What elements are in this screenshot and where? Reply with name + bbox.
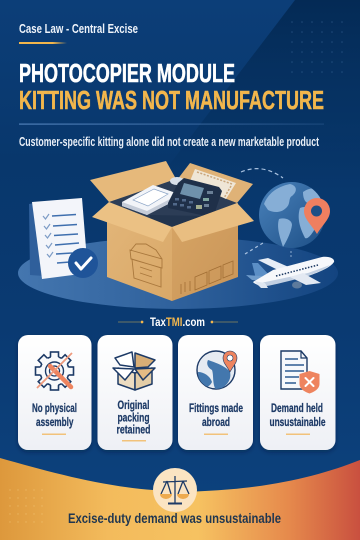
icon: globe and pin — [197, 351, 237, 390]
label: Original — [118, 398, 150, 412]
label: retained — [116, 422, 150, 436]
label — [189, 401, 243, 429]
brand label — [118, 315, 238, 329]
label: No physical — [32, 401, 77, 415]
platform disc — [18, 237, 338, 309]
label: assembly — [36, 415, 74, 429]
handling marks — [181, 261, 233, 294]
label: packing — [118, 410, 150, 424]
title line 1: PHOTOCOPIER MODULE — [19, 60, 235, 88]
location pin — [304, 198, 330, 234]
keypad device — [168, 178, 222, 216]
copier outline on box — [130, 244, 162, 287]
icon: open box — [113, 352, 155, 390]
panel: original packing retained — [98, 335, 172, 450]
icon: globe with location pin — [241, 169, 330, 259]
hero illustration — [18, 161, 338, 309]
label: unsustainable — [270, 415, 326, 429]
panel: demand held unsustainable — [260, 335, 336, 450]
panel: no physical assembly — [18, 335, 92, 450]
icon: scales of justice — [153, 468, 197, 512]
footer band — [0, 458, 360, 540]
packed copier module — [122, 177, 184, 215]
label — [116, 398, 150, 436]
brand label: TaxTMI.com — [150, 315, 205, 329]
label — [32, 401, 77, 429]
category label: Case Law - Central Excise — [19, 22, 138, 36]
panel: fittings made abroad — [178, 335, 253, 450]
label: Fittings made — [189, 401, 243, 415]
icon: airplane — [246, 257, 334, 288]
icon: crossed-out gear — [36, 352, 74, 390]
label: Demand held — [271, 401, 323, 415]
label — [270, 401, 326, 429]
header text block — [19, 22, 324, 149]
icon: open cardboard box — [90, 161, 254, 301]
icon: check badge — [68, 248, 98, 278]
conclusion text: Excise-duty demand was unsustainable — [68, 510, 281, 526]
icon: document with warning shield — [281, 351, 320, 394]
label: abroad — [202, 415, 230, 429]
icon: checklist document — [29, 198, 98, 279]
